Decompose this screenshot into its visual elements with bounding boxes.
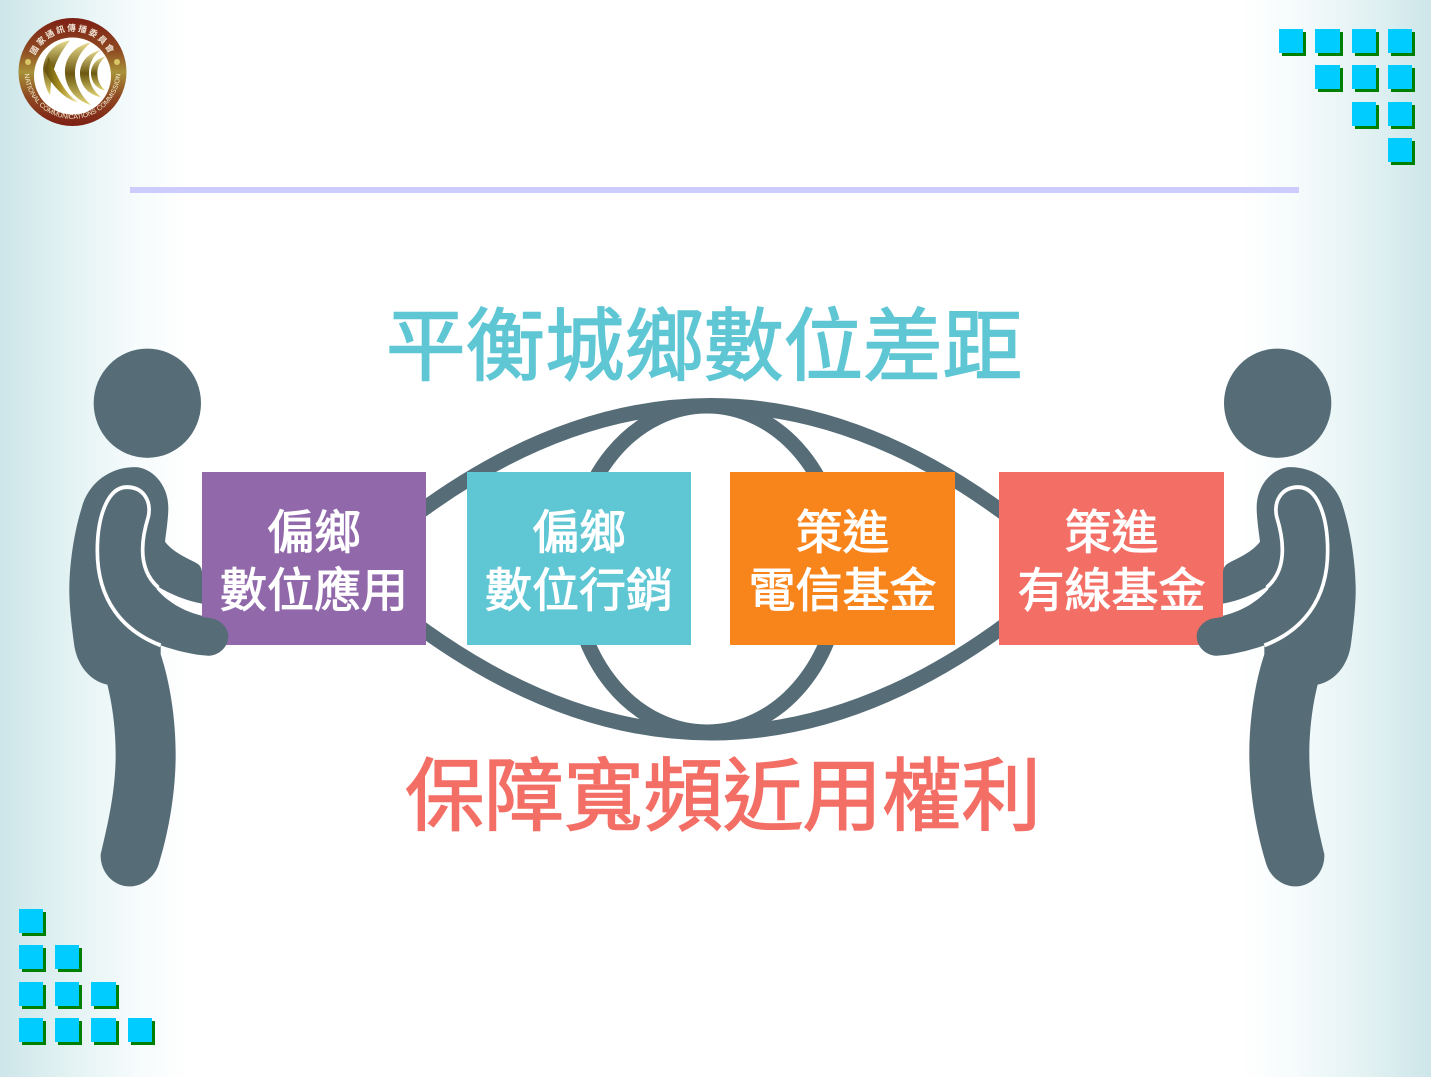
panel: telecom fund [730,472,955,645]
panel: cable fund: 策進 [1064,506,1158,559]
panel: telecom fund: 策進 [796,506,890,559]
panel: telecom fund: 電信基金 [748,564,936,617]
panel: cable fund: 有線基金 [1018,564,1206,617]
panel: rural digital applications [202,472,426,645]
heading: bottom slogan: 保障寬頻近用權利 [405,752,1041,841]
panel: rural digital marketing: 偏鄉 [532,506,626,559]
panel: rural digital applications: 數位應用 [220,564,408,617]
logo: National Communications Commission: NATIONAL COMMUNICATIONS COMMISSION [24,74,120,119]
logo: National Communications Commission: 國家通訊傳播委員會 [29,24,114,56]
decorative squares: top right [1279,29,1415,165]
logo: National Communications Commission [18,18,126,126]
panel: rural digital applications: 偏鄉 [267,506,361,559]
header divider line [130,187,1299,193]
panel: rural digital marketing [467,472,691,645]
decorative squares: bottom left [19,909,155,1045]
panel: cable fund [999,472,1224,645]
heading: top slogan: 平衡城鄉數位差距 [386,302,1022,391]
panel: rural digital marketing: 數位行銷 [485,564,673,617]
